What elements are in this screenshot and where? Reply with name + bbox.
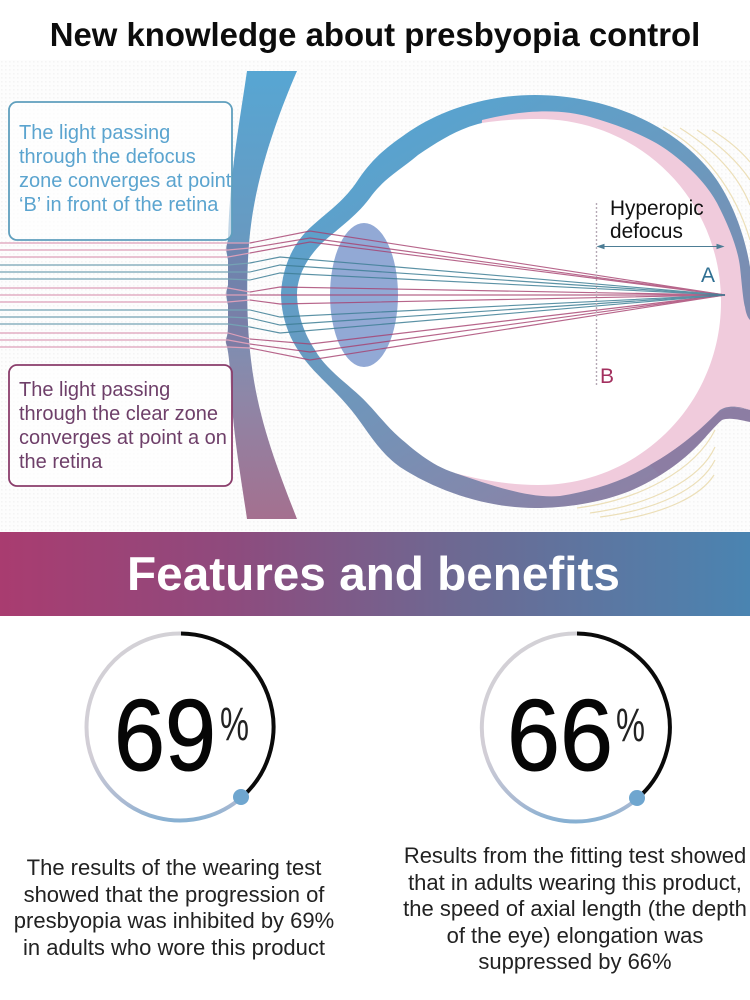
gauge: 66 percent [482,633,670,821]
hyperopic defocus arrow [598,244,723,248]
callout text: defocus zone: ‘B’ in front of the retina [19,194,218,216]
callout text: clear zone: The light passing [19,379,170,401]
callout text: defocus zone: The light passing [19,122,170,144]
title: New knowledge about presbyopia control [50,16,700,53]
caption: 66 percent: the speed of axial length (the depth [403,896,747,921]
lens optical zone [226,243,250,347]
caption: 69 percent: presbyopia was inhibited by 69% [14,908,334,933]
eye diagram [0,61,750,530]
gauge: 69 percent [84,632,672,824]
caption: 66 percent: that in adults wearing this product, [408,870,742,895]
caption: 69 percent [14,855,334,960]
vitreous interior [297,119,721,485]
focal plane dotted line [596,203,598,385]
banner heading: Features and benefits [127,548,620,601]
callout box: defocus zone [9,102,232,240]
caption: 66 percent [403,843,747,974]
label: hyperopic defocus: Hyperopic [610,197,704,220]
gauge: 66 percent: % [616,698,645,751]
callout text: clear zone: through the clear zone [19,403,218,425]
choroid pink layer [455,111,750,496]
caption: 69 percent: in adults who wore this product [23,935,325,960]
light rays [0,231,725,360]
callout text: clear zone: converges at point a on [19,427,227,449]
eyeball outer wall [281,95,750,508]
section banner [0,532,750,616]
label: hyperopic defocus: defocus [610,220,683,243]
crystalline lens [330,223,398,367]
gauge: 69 percent: % [220,697,249,750]
label: point B: B [600,365,614,388]
gauge: 66 percent: 66 [507,680,613,792]
callout box: clear zone [9,365,232,486]
sclera fringe lines [577,127,750,520]
lower optic nerve band [650,408,750,475]
callout text: defocus zone: through the defocus [19,146,196,168]
label: hyperopic defocus [610,197,704,243]
caption: 66 percent: of the eye) elongation was [447,923,703,948]
gauge: 69 percent: 69 [114,680,216,792]
callout text: clear zone: the retina [19,451,102,473]
caption: 69 percent: The results of the wearing test [27,855,321,880]
corrective lens [226,71,297,519]
callout text: defocus zone: zone converges at point [19,170,231,192]
caption: 69 percent: showed that the progression of [24,882,324,907]
caption: 66 percent: suppressed by 66% [478,949,672,974]
label: point A: A [701,264,715,287]
callout text: defocus zone [19,122,232,216]
caption: 66 percent: Results from the fitting test showed [404,843,746,868]
callout text: clear zone [19,379,227,473]
